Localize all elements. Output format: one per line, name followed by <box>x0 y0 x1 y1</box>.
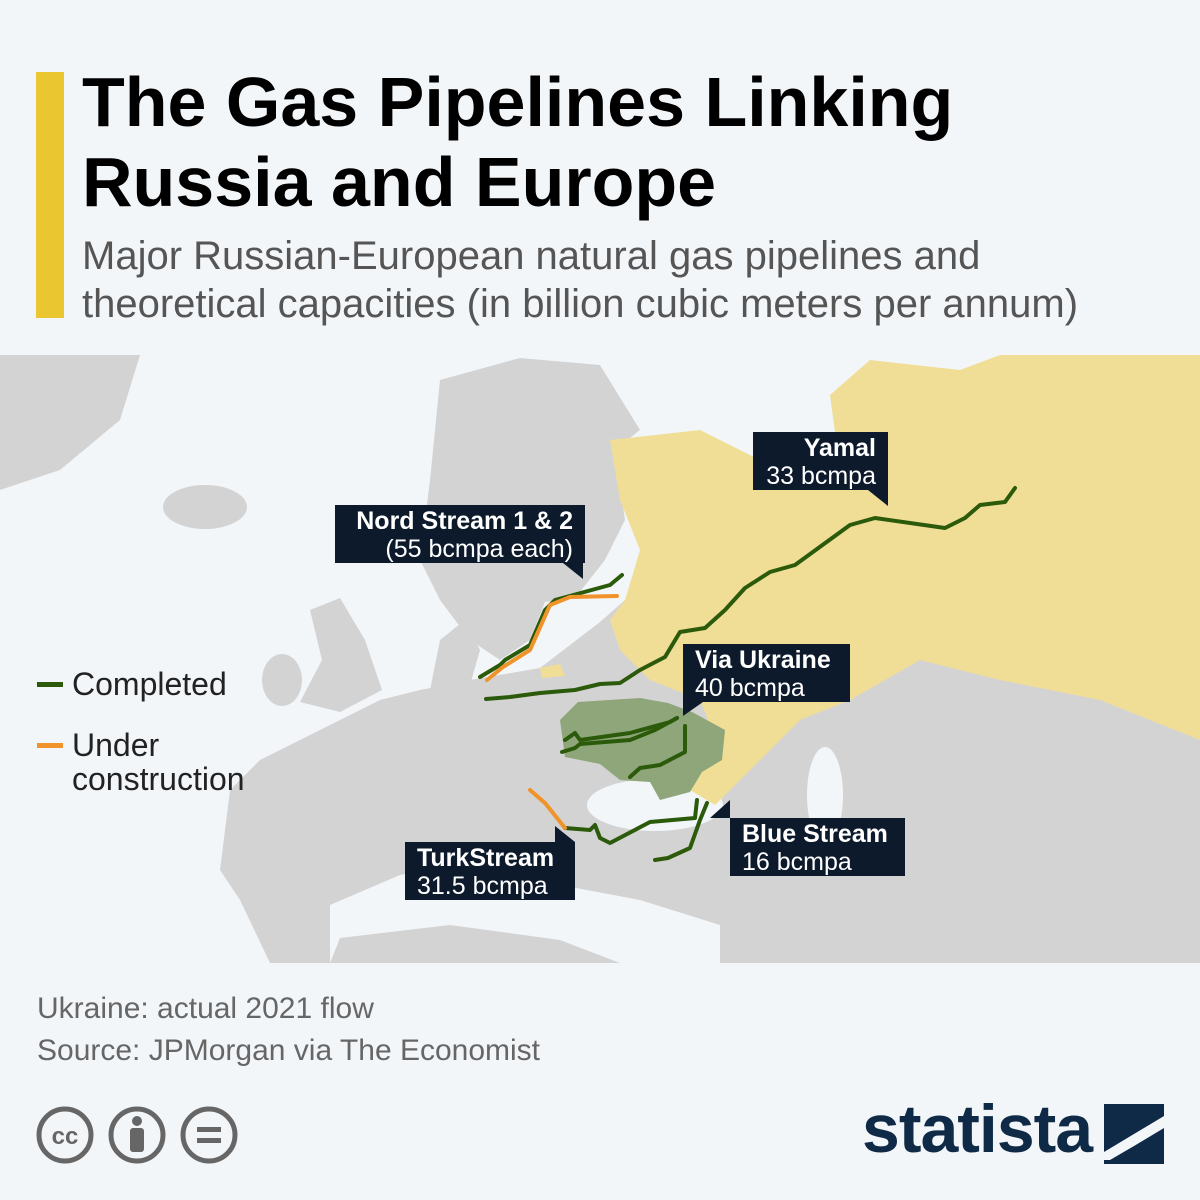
legend: under construction: construction <box>72 761 245 797</box>
label: Nord Stream: Nord Stream 1 & 2 <box>356 507 573 535</box>
label: Yamal <box>753 432 888 490</box>
label: TurkStream: TurkStream <box>417 844 554 872</box>
icons: creative commons <box>36 1106 238 1164</box>
Ukraine <box>560 698 725 800</box>
title: Russia and Europe <box>82 143 716 221</box>
pointer: Via Ukraine <box>683 702 703 716</box>
legend <box>37 666 245 797</box>
subtitle: theoretical capacities (in billion cubic meters per annum) <box>82 282 1078 326</box>
label: TurkStream: 31.5 bcmpa <box>417 872 548 900</box>
pointer: Yamal <box>868 490 888 506</box>
label: Via Ukraine <box>683 644 850 702</box>
map <box>0 355 1200 963</box>
footnotes: Ukraine: actual 2021 flow <box>37 992 374 1025</box>
legend: completed: Completed <box>72 666 227 702</box>
subtitle: Major Russian-European natural gas pipelines and <box>82 234 980 278</box>
pointer: Nord Stream <box>563 563 583 579</box>
label: Blue Stream: 16 bcmpa <box>742 848 852 876</box>
pipelines under construction <box>487 596 617 828</box>
label: Yamal: Yamal <box>804 434 876 462</box>
accent bar <box>36 72 64 318</box>
label: Nord Stream <box>335 505 585 563</box>
pointer: TurkStream <box>555 826 575 842</box>
legend: under construction: Under <box>72 727 159 763</box>
label: Blue Stream <box>730 818 905 876</box>
logo: statista: statista <box>862 1091 1092 1167</box>
label: Blue Stream: Blue Stream <box>742 820 888 848</box>
pipelines completed <box>480 488 1015 860</box>
footnotes <box>37 992 540 1067</box>
pointer: Blue Stream <box>710 800 730 818</box>
Russia <box>610 355 1200 805</box>
subtitle <box>82 234 1078 326</box>
label: Yamal: 33 bcmpa <box>766 462 876 490</box>
label: Via Ukraine: 40 bcmpa <box>695 674 805 702</box>
title <box>82 63 953 221</box>
label: Via Ukraine: Via Ukraine <box>695 646 831 674</box>
label: TurkStream <box>405 842 575 900</box>
icons: creative commons: cc <box>52 1123 78 1150</box>
label: Nord Stream: (55 bcmpa each) <box>385 535 573 563</box>
legend: under construction <box>37 727 245 797</box>
footnotes: Source: JPMorgan via The Economist <box>37 1034 540 1067</box>
title: The Gas Pipelines Linking <box>82 63 953 141</box>
